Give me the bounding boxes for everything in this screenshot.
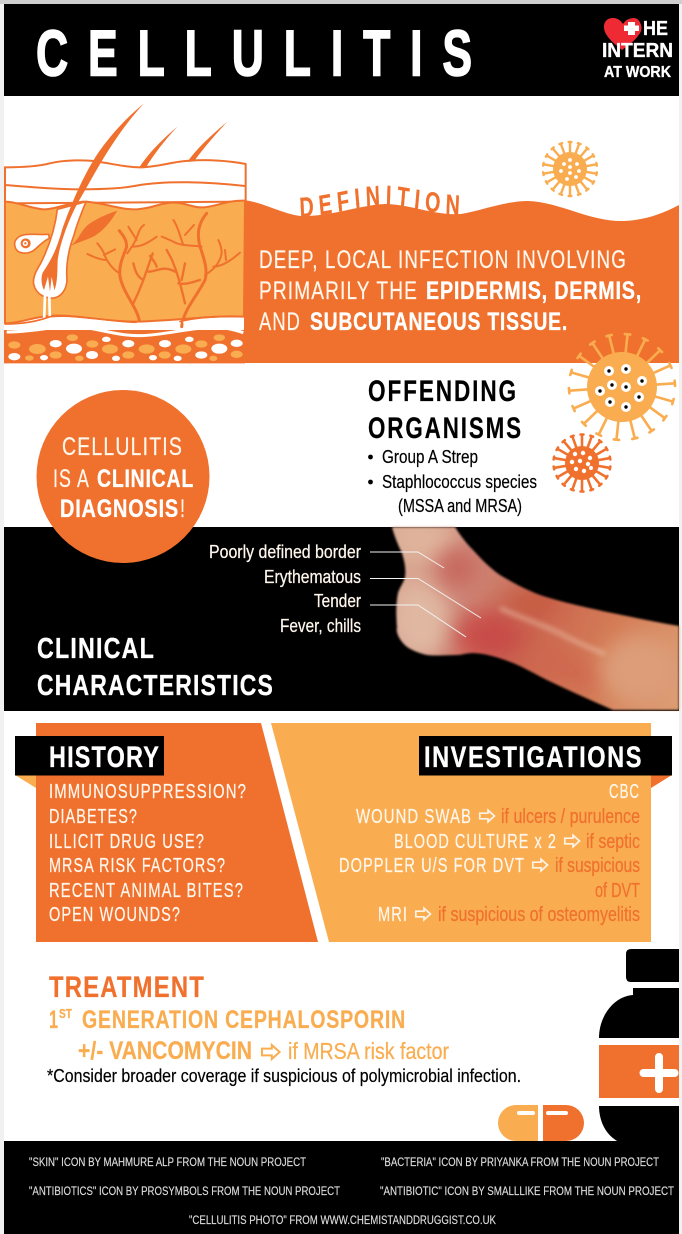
icon: small bacterium: [543, 142, 597, 196]
logo: the intern at work: AT WORK: [604, 64, 671, 81]
investigations list: CBC: [609, 780, 640, 803]
panel: offending organisms: [368, 375, 537, 516]
panel: definition: [244, 140, 679, 363]
definition text: [259, 246, 642, 336]
dermis: [5, 201, 245, 323]
icon: pill capsule: [498, 1105, 584, 1141]
characteristics list: Tender: [314, 590, 361, 611]
heading: [15, 736, 164, 776]
first line treatment: GENERATION CEPHALOSPORIN: [82, 1006, 406, 1034]
callout: clinical diagnosis circle: !: [180, 495, 185, 523]
organism list: [368, 446, 537, 516]
investigations list: if suspicious: [555, 854, 640, 877]
characteristics list: [209, 541, 361, 636]
panel: clinical characteristics: CHARACTERISTICS: [37, 670, 274, 702]
callout: clinical diagnosis circle: CELLULITIS: [62, 433, 183, 461]
organism list: (MSSA and MRSA): [398, 495, 522, 516]
history list: MRSA RISK FACTORS?: [49, 854, 226, 877]
history list: [49, 780, 247, 926]
panel: investigations: [271, 723, 672, 942]
investigations list: DOPPLER U/S FOR DVT: [339, 854, 525, 877]
callout: clinical diagnosis circle: DIAGNOSIS: [60, 495, 179, 523]
header banner: [4, 4, 679, 96]
characteristics list: Erythematous: [264, 566, 361, 587]
footnote: *Consider broader coverage if suspicious of polymicrobial infection.: [47, 1066, 521, 1086]
photo: inflamed leg: [370, 518, 682, 715]
sebaceous gland: [15, 234, 49, 253]
first line treatment: ST: [59, 1006, 72, 1021]
investigations list: BLOOD CULTURE x 2: [394, 830, 557, 853]
hair shafts: [139, 127, 177, 167]
organism list: Staphlococcus species: [382, 471, 537, 492]
main hair: [42, 103, 144, 292]
heading: TREATMENT: [49, 971, 205, 1004]
panel: clinical characteristics: [4, 518, 682, 715]
definition heading on curve: DEFINITION: [300, 186, 459, 216]
panel: history: [15, 723, 318, 942]
fold: [651, 775, 672, 788]
second line treatment: if MRSA risk factor: [288, 1038, 449, 1064]
investigations list: of DVT: [595, 879, 640, 902]
callout: clinical diagnosis circle: IS A: [53, 465, 90, 493]
characteristics list: Fever, chills: [280, 615, 361, 636]
footer: credits: [4, 1141, 679, 1234]
title: CELLULITIS: [36, 16, 492, 90]
second line treatment: [78, 1037, 449, 1065]
investigations list: MRI: [378, 903, 408, 926]
second line treatment: +/- VANCOMYCIN: [78, 1037, 252, 1065]
icon: large bacterium: [564, 329, 680, 445]
definition text: AND: [259, 308, 301, 336]
history list: ILLICIT DRUG USE?: [49, 830, 205, 853]
logo: the intern at work: HE: [643, 18, 668, 40]
callout: clinical diagnosis circle: [36, 390, 210, 563]
icon: medicine bottle: [599, 949, 679, 1142]
definition text: SUBCUTANEOUS TISSUE.: [310, 308, 568, 336]
organism list: Group A Strep: [382, 446, 478, 467]
orange wave band: [244, 200, 679, 363]
icon: small orange bacterium: [554, 434, 610, 492]
logo: the intern at work: INTERN: [602, 40, 673, 62]
investigations list: if septic: [586, 830, 640, 853]
arrector muscle: [68, 211, 117, 247]
hair follicle sheath: [33, 202, 86, 298]
first line treatment: 1: [49, 1006, 58, 1034]
history list: RECENT ANIMAL BITES?: [49, 879, 244, 902]
fat layer: [4, 330, 245, 363]
investigations list: [339, 780, 640, 926]
panel: treatment: [47, 971, 521, 1086]
fold: [15, 775, 36, 788]
icon: skin cross-section: [4, 103, 246, 363]
white dermal strips: [44, 295, 50, 323]
history list: OPEN WOUNDS?: [49, 903, 181, 926]
heading: CLINICAL: [37, 633, 155, 665]
heading: HISTORY: [49, 741, 160, 774]
panel: offending organisms: ORGANISMS: [368, 412, 523, 445]
leader lines: [370, 552, 481, 637]
footer: credits: "SKIN" ICON BY MAHMURE ALP FROM THE NOUN PROJECT: [29, 1155, 307, 1169]
investigations list: if ulcers / purulence: [501, 805, 640, 828]
epidermis layers: [5, 160, 246, 203]
footer: credits: "CELLULITIS PHOTO" FROM WWW.CHEMISTANDDRUGGIST.CO.UK: [189, 1213, 496, 1227]
investigations list: WOUND SWAB: [356, 805, 472, 828]
history list: DIABETES?: [49, 805, 138, 828]
history list: IMMUNOSUPPRESSION?: [49, 780, 247, 803]
callout: clinical diagnosis circle: CLINICAL: [97, 465, 194, 493]
blood vessels: [87, 213, 240, 327]
top edge: [0, 0, 682, 4]
characteristics list: Poorly defined border: [209, 541, 361, 562]
heading: OFFENDING: [368, 375, 518, 408]
logo: the intern at work: [602, 18, 673, 81]
definition text: PRIMARILY THE: [259, 277, 418, 305]
footer: credits: "ANTIBIOTICS" ICON BY PROSYMBOLS FROM THE NOUN PROJECT: [29, 1184, 341, 1198]
